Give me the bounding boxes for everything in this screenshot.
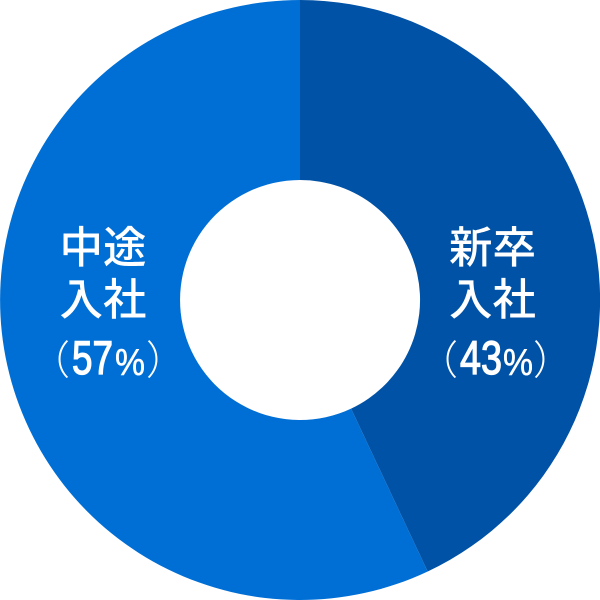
value: 43%: % <box>503 342 533 383</box>
label: mid-career hires: 中途 <box>60 225 146 273</box>
value: 43%: （ <box>418 328 458 386</box>
label: mid-career hires <box>30 225 186 386</box>
value: 43% <box>418 328 573 386</box>
label: new graduate hires: 入社 <box>449 277 536 325</box>
value: 57%: % <box>115 342 145 383</box>
segment: new graduate hires 43% <box>300 0 600 571</box>
value: 57%: （ <box>30 328 70 386</box>
segment: mid-career hires 57% <box>0 0 428 600</box>
label: new graduate hires <box>418 225 573 386</box>
value: 57% <box>30 328 186 386</box>
value: 57%: 57 <box>72 331 113 384</box>
label: mid-career hires: 入社 <box>60 277 146 325</box>
value: 43%: ） <box>533 328 573 386</box>
label: new graduate hires: 新卒 <box>449 225 536 273</box>
value: 57%: ） <box>146 328 186 386</box>
value: 43%: 43 <box>460 331 502 384</box>
